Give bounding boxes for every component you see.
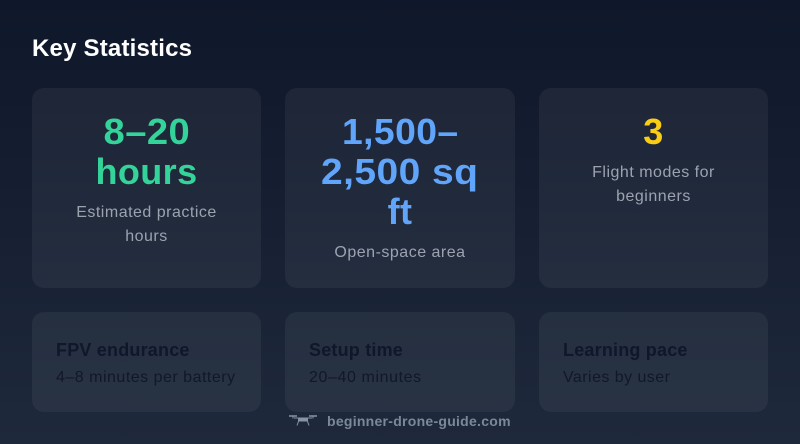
stat value: open-space area: 2,500 sq	[321, 151, 479, 192]
stat value: practice hours	[95, 111, 198, 192]
stat label: practice hours: Estimated practice	[76, 204, 217, 221]
card text: setup time: 20–40 minutes	[309, 369, 422, 386]
stat value: practice hours: 8–20	[103, 111, 190, 152]
title: Key Statistics	[32, 35, 192, 62]
stat label: flight modes: Flight modes for	[592, 164, 715, 181]
stat label: open-space area: Open-space area	[334, 244, 466, 261]
panel: learning pace	[539, 312, 768, 412]
stat value: practice hours: hours	[95, 151, 198, 192]
card heading: setup time: Setup time	[309, 340, 403, 360]
card heading: learning pace: Learning pace	[563, 340, 688, 360]
stat label: flight modes	[592, 164, 715, 205]
panel: practice hours	[32, 88, 261, 288]
card text: FPV endurance: 4–8 minutes per battery	[56, 369, 236, 386]
site name: beginner-drone-guide.com	[327, 413, 511, 429]
stat label: practice hours	[76, 204, 217, 245]
panel: FPV endurance	[32, 312, 261, 412]
stat label: practice hours: hours	[125, 228, 168, 245]
card text: learning pace: Varies by user	[563, 369, 670, 386]
stat value: open-space area: 1,500–	[342, 111, 458, 152]
panel: setup time	[285, 312, 515, 412]
stat value: open-space area	[321, 111, 479, 232]
panel: flight modes	[539, 88, 768, 288]
stat label: flight modes: beginners	[616, 188, 691, 205]
stat value: open-space area: ft	[388, 191, 412, 232]
icon: drone	[289, 415, 317, 426]
stat value: flight modes: 3	[643, 111, 664, 152]
panel: open-space area	[285, 88, 515, 288]
card heading: FPV endurance: FPV endurance	[56, 340, 190, 360]
footer: drone logo and site name	[289, 413, 511, 429]
